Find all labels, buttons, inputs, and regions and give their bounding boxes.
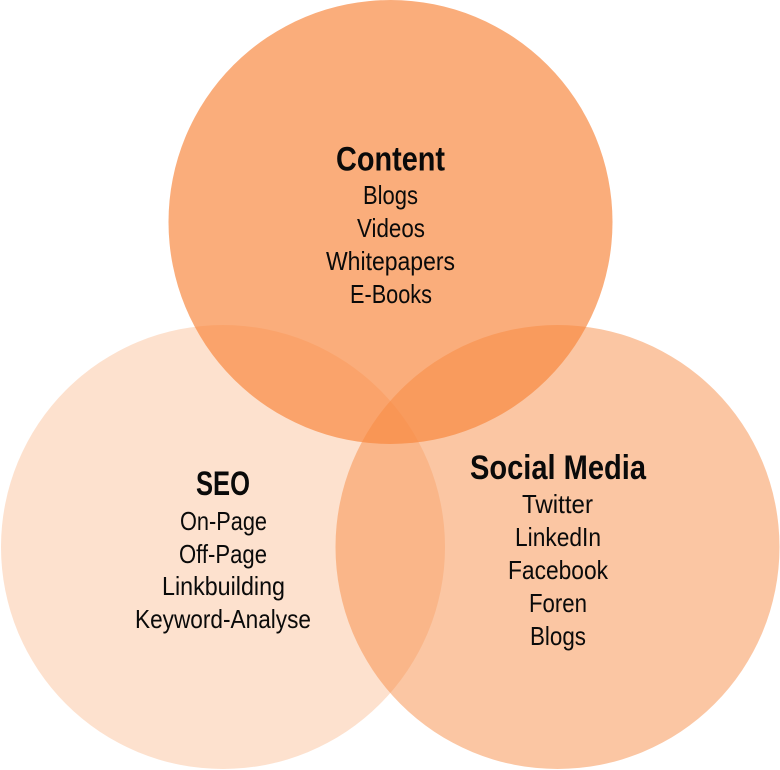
circle: Content xyxy=(168,0,612,444)
list item: Blogs: Blogs xyxy=(530,621,586,651)
list item: E-Books: E-Books xyxy=(350,279,432,309)
text block: SEO xyxy=(135,465,311,634)
list item: Facebook: Facebook xyxy=(508,555,609,585)
list item: Linkbuilding: Linkbuilding xyxy=(162,571,285,601)
circle: SEO xyxy=(1,325,445,769)
text block: Social Media xyxy=(470,449,647,651)
list item: On-Page: On-Page xyxy=(180,506,267,536)
list item: Twitter: Twitter xyxy=(522,489,593,519)
list item: Whitepapers: Whitepapers xyxy=(326,246,455,276)
heading: Social Media: Social Media xyxy=(470,449,647,487)
text block: Content xyxy=(326,140,455,309)
list item: Keyword-Analyse: Keyword-Analyse xyxy=(135,604,311,634)
heading: Content: Content xyxy=(336,140,445,178)
list item: Off-Page: Off-Page xyxy=(179,539,267,569)
list item: Videos: Videos xyxy=(357,213,425,243)
list item: LinkedIn: LinkedIn xyxy=(515,522,601,552)
circle: Social Media xyxy=(336,325,780,769)
list item: Blogs: Blogs xyxy=(363,180,418,210)
heading: SEO: SEO xyxy=(196,465,250,503)
list item: Foren: Foren xyxy=(529,588,587,618)
